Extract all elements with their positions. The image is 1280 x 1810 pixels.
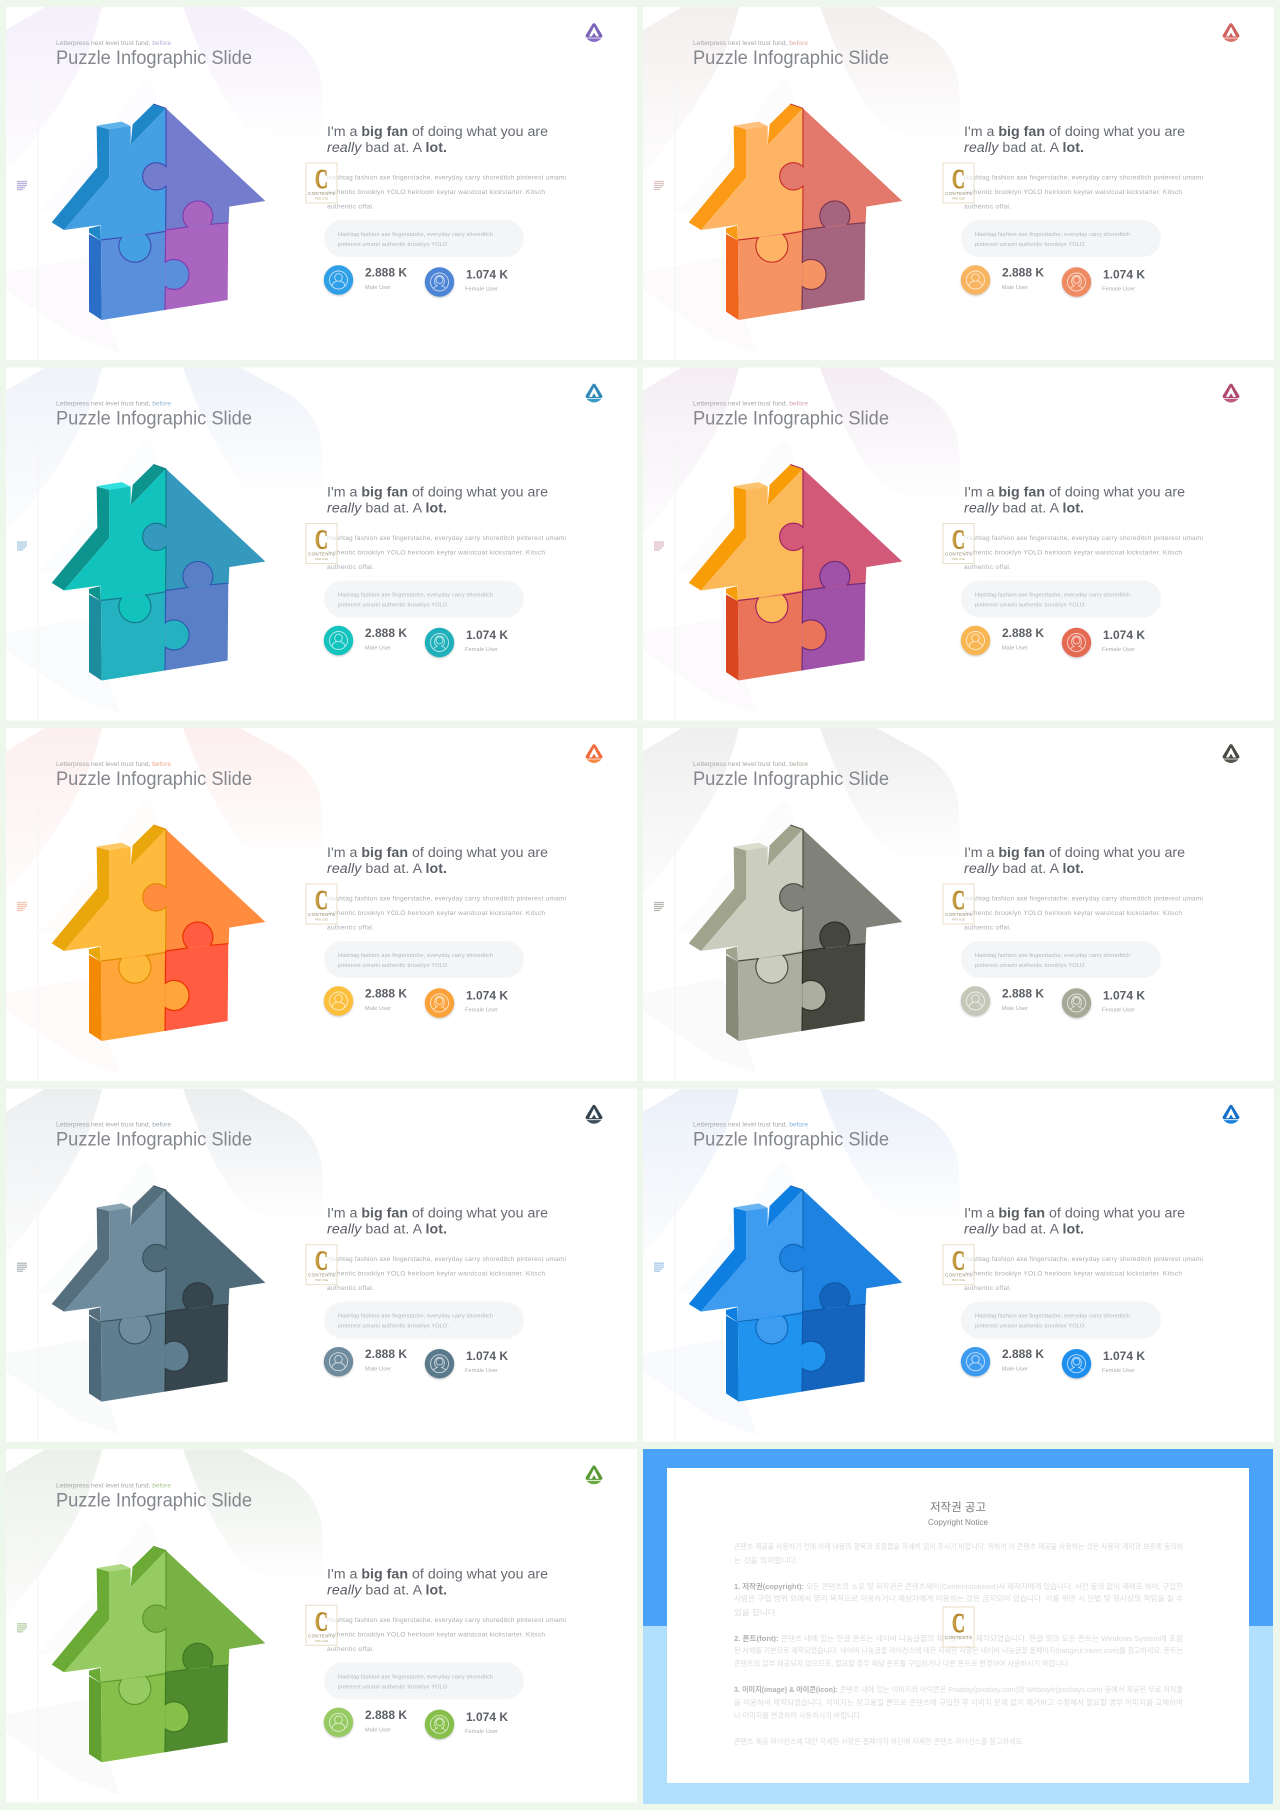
stat: female user: 1.074 K [1103, 628, 1145, 642]
heading: I'm a big fan of doing what you are [964, 1206, 1185, 1222]
panel background [6, 7, 637, 360]
heading: I'm a big fan of doing what you are [327, 845, 548, 861]
callout pill: pinterest umami authentic brooklyn YOLO. [975, 242, 1086, 248]
logo icon [1224, 386, 1238, 402]
body text: authentic brooklyn YOLO heirloom keytar waistcoat kickstarter. Kitsch [964, 910, 1182, 917]
slide 7: slate [6, 1089, 637, 1442]
watermark: CONTENTS [308, 191, 335, 196]
body text [964, 535, 1204, 571]
callout pill: Hashtag fashion axe fingerstache, everyday carry shoreditch [338, 232, 493, 238]
stat: male user: Male User [1002, 1006, 1028, 1012]
stat: female user: 1.074 K [466, 268, 508, 282]
body text: Hashtag fashion axe fingerstache, everyday carry shoreditch pinterest umami [327, 174, 567, 182]
callout pill: pinterest umami authentic brooklyn YOLO. [975, 1324, 1086, 1330]
stat: female user: Female User [1102, 1008, 1135, 1014]
body text [327, 174, 567, 210]
title: Puzzle Infographic Slide [56, 48, 252, 69]
panel background [6, 1089, 637, 1442]
body text: authentic brooklyn YOLO heirloom keytar waistcoat kickstarter. Kitsch [327, 1271, 545, 1278]
stat: male user: Male User [365, 646, 391, 652]
stat: male user [324, 986, 407, 1016]
side notes [654, 902, 664, 910]
title: Puzzle Infographic Slide [693, 769, 889, 790]
kicker text: Letterpress next level trust fund, before [56, 400, 171, 408]
stat: male user [961, 986, 1044, 1016]
slide 3: teal blue [6, 368, 637, 720]
body text [327, 1256, 567, 1292]
slide 7: slate: really bad at. A lot. [327, 1222, 447, 1238]
stat: male user: 2.888 K [365, 266, 407, 280]
stat: female user [425, 1349, 508, 1378]
watermark: C [315, 1606, 328, 1636]
stat: male user: 2.888 K [1002, 626, 1044, 640]
callout pill [324, 1302, 524, 1339]
slide 5: yellow red [6, 728, 637, 1081]
watermark: C [952, 1608, 965, 1638]
slide 6: olive grey: really bad at. A lot. [964, 861, 1084, 877]
body text: authentic brooklyn YOLO heirloom keytar waistcoat kickstarter. Kitsch [327, 910, 545, 917]
slide 8: bright blue [643, 1089, 1274, 1442]
stat: female user: Female User [465, 1729, 498, 1735]
stat: male user [324, 1347, 407, 1376]
side notes [17, 182, 27, 190]
body text: authentic offal. [327, 924, 374, 932]
watermark: CONTENTS [308, 1273, 335, 1278]
clause 2: 콘텐츠의 일부 제공되지 않으므로, 필요할 경우 해당 폰트를 구입하거나 다른 폰트로 변경하여 사용하시기 바랍니다. [734, 1658, 1070, 1668]
heading: I'm a big fan of doing what you are [327, 484, 548, 500]
panel background [643, 7, 1274, 360]
stat: male user: Male User [1002, 285, 1028, 291]
notice title: 저작권 공고 [930, 1501, 986, 1514]
stat: female user [425, 1710, 508, 1739]
stat: male user: 2.888 K [1002, 1347, 1044, 1361]
title: Puzzle Infographic Slide [693, 408, 889, 430]
intro paragraph [734, 1541, 1183, 1565]
logo icon [586, 746, 602, 763]
kicker text: Letterpress next level trust fund, before [56, 1482, 171, 1489]
body text: authentic offal. [327, 204, 374, 210]
body text: authentic offal. [327, 1285, 374, 1292]
watermark: PRO USE [315, 1278, 328, 1282]
clause 1 [734, 1581, 1183, 1617]
watermark: CONTENTS [945, 1635, 972, 1640]
body text: Hashtag fashion axe fingerstache, everyday carry shoreditch pinterest umami [964, 174, 1204, 182]
watermark: CONTENTS [945, 552, 972, 556]
heading: I'm a big fan of doing what you are [327, 1206, 548, 1222]
body text [327, 535, 567, 571]
watermark: PRO USE [315, 196, 328, 200]
watermark [943, 884, 974, 924]
side notes [17, 902, 27, 910]
kicker text: Letterpress next level trust fund, before [693, 40, 808, 47]
puzzle house [689, 1186, 902, 1402]
stat: female user: Female User [1102, 1368, 1135, 1374]
body text: authentic offal. [964, 204, 1011, 210]
body text: authentic offal. [964, 564, 1011, 571]
side notes [17, 542, 27, 550]
stat: female user: 1.074 K [466, 1349, 508, 1363]
watermark: PRO USE [952, 918, 965, 922]
body text: Hashtag fashion axe fingerstache, everyday carry shoreditch pinterest umami [327, 535, 567, 542]
watermark: CONTENTS [308, 912, 335, 917]
logo icon [586, 1107, 602, 1124]
watermark: PRO USE [952, 196, 965, 200]
watermark: CONTENTS [308, 1633, 335, 1638]
stat: female user: Female User [465, 286, 498, 292]
stat: male user [324, 1708, 407, 1737]
heading: I'm a big fan of doing what you are [964, 124, 1185, 140]
callout pill: pinterest umami authentic brooklyn YOLO. [338, 963, 449, 969]
closing line: 콘텐츠 제공 라이선스에 대한 자세한 사항은 홈페이지 하단에 자세한 콘텐츠 라이선스를 참고하세요. [734, 1736, 1024, 1746]
stat: male user: Male User [365, 1006, 391, 1012]
heading: I'm a big fan of doing what you are [964, 845, 1185, 861]
watermark [306, 884, 337, 924]
callout pill: Hashtag fashion axe fingerstache, everyday carry shoreditch [975, 1314, 1130, 1320]
callout pill: Hashtag fashion axe fingerstache, everyday carry shoreditch [338, 1314, 493, 1320]
watermark: C [315, 164, 328, 194]
heading: I'm a big fan of doing what you are [327, 124, 548, 140]
clause 2: 된 서체를 기본으로 제작되었습니다. 네이버 나눔글꼴 라이선스에 대한 자세한 사항은 네이버 나눔글꼴 홈페이지(hangeul.naver.com)를 참고하세요. 폰트는 [734, 1645, 1183, 1655]
callout pill [961, 941, 1161, 978]
kicker text: Letterpress next level trust fund, before [56, 761, 171, 768]
slide 4: amber magenta [643, 368, 1274, 720]
callout pill: pinterest umami authentic brooklyn YOLO. [338, 1324, 449, 1330]
stat: male user: 2.888 K [365, 986, 407, 1000]
slide 4: amber magenta: really bad at. A lot. [964, 500, 1084, 516]
stat: female user [1062, 628, 1145, 657]
body text: authentic offal. [327, 1646, 374, 1653]
body text: authentic brooklyn YOLO heirloom keytar waistcoat kickstarter. Kitsch [327, 550, 545, 556]
panel: copyright notice [643, 1449, 1273, 1804]
stat: male user: 2.888 K [1002, 986, 1044, 1000]
body text [964, 896, 1204, 932]
logo icon [1224, 1107, 1238, 1124]
intro paragraph: 는 것을 의미합니다. [734, 1555, 798, 1565]
body text: authentic offal. [327, 564, 374, 571]
callout pill: pinterest umami authentic brooklyn YOLO. [338, 602, 449, 608]
stat: male user [961, 1347, 1044, 1376]
stat: male user: 2.888 K [365, 1347, 407, 1361]
stat: female user: 1.074 K [1103, 1349, 1145, 1363]
watermark [306, 1245, 337, 1285]
stat: male user [961, 265, 1044, 295]
callout pill: pinterest umami authentic brooklyn YOLO. [338, 1684, 449, 1690]
puzzle house [689, 825, 902, 1041]
clause 2: 2. 폰트(font): 콘텐츠 내에 있는 한글 폰트는 네이버 나눔글꼴의 제작물이며, 제작되었습니다. 한글 외의 모든 폰트는 Windows System에 포함 [734, 1633, 1183, 1643]
heading: I'm a big fan of doing what you are [964, 484, 1185, 500]
slide 9: green [6, 1449, 637, 1802]
watermark: C [952, 164, 965, 194]
stat: female user [425, 267, 508, 297]
title: Puzzle Infographic Slide [56, 1130, 252, 1151]
body text [964, 1256, 1204, 1292]
kicker text: Letterpress next level trust fund, before [56, 40, 171, 47]
body text: Hashtag fashion axe fingerstache, everyday carry shoreditch pinterest umami [964, 535, 1204, 542]
slide 6: olive grey [643, 728, 1274, 1081]
callout pill: Hashtag fashion axe fingerstache, everyday carry shoreditch [338, 1674, 493, 1680]
stat: male user: Male User [365, 285, 391, 291]
intro paragraph: 콘텐츠 제공을 사용하기 전에 아래 내용의 항목과 조항들을 자세히 읽어 주시기 바랍니다. 위하여 이 콘텐츠 제공을 사용하는 것은 사용자 계약과 보증에 동의하 [734, 1541, 1183, 1551]
slide 9: green: really bad at. A lot. [327, 1582, 447, 1598]
callout pill [324, 580, 524, 618]
clause 3: 나 이미지를 변경하여 사용하시기 바랍니다. [734, 1710, 862, 1720]
watermark: C [315, 1246, 328, 1276]
stat: male user: Male User [365, 1727, 391, 1733]
puzzle house [52, 825, 265, 1041]
callout pill [961, 580, 1161, 618]
body text [327, 1617, 567, 1653]
stat: male user: Male User [365, 1367, 391, 1373]
body text: authentic brooklyn YOLO heirloom keytar waistcoat kickstarter. Kitsch [327, 1631, 545, 1638]
callout pill: pinterest umami authentic brooklyn YOLO. [975, 963, 1086, 969]
clause 3 [734, 1684, 1183, 1720]
stat: female user [1062, 1349, 1145, 1378]
kicker text: Letterpress next level trust fund, before [693, 1122, 808, 1129]
watermark [943, 163, 974, 203]
body text: Hashtag fashion axe fingerstache, everyday carry shoreditch pinterest umami [964, 896, 1204, 902]
title: Puzzle Infographic Slide [56, 769, 252, 790]
panel background [6, 728, 637, 1081]
stat: female user [1062, 267, 1145, 297]
stat: male user: 2.888 K [365, 626, 407, 640]
watermark [306, 524, 337, 564]
body text: authentic offal. [964, 924, 1011, 932]
watermark: CONTENTS [945, 191, 972, 196]
panel background [643, 368, 1274, 720]
callout pill [961, 1302, 1161, 1339]
panel background [643, 728, 1274, 1081]
watermark [943, 1607, 974, 1647]
callout pill: Hashtag fashion axe fingerstache, everyday carry shoreditch [338, 592, 493, 598]
puzzle house [689, 464, 902, 680]
stat: male user [324, 626, 407, 655]
body text: authentic brooklyn YOLO heirloom keytar waistcoat kickstarter. Kitsch [964, 189, 1182, 196]
white sheet [667, 1468, 1249, 1783]
watermark [943, 524, 974, 564]
stat: male user [961, 626, 1044, 655]
slide 8: bright blue: really bad at. A lot. [964, 1222, 1084, 1238]
logo icon [586, 1467, 602, 1484]
stat: female user: Female User [1102, 647, 1135, 653]
logo icon [586, 25, 602, 42]
puzzle house [52, 1546, 265, 1762]
watermark: CONTENTS [308, 552, 335, 556]
stat: male user: Male User [1002, 646, 1028, 652]
panel background [6, 1449, 637, 1802]
slide 2: orange mauve: really bad at. A lot. [964, 140, 1084, 156]
logo icon [1224, 25, 1238, 42]
slide 3: teal blue: really bad at. A lot. [327, 500, 447, 516]
stat: female user: 1.074 K [466, 1710, 508, 1724]
slide 1: blue purple: really bad at. A lot. [327, 140, 447, 156]
watermark: PRO USE [952, 1278, 965, 1282]
watermark: C [315, 524, 328, 554]
slide 1: blue purple [6, 7, 637, 360]
clause 1: 1. 저작권(copyright): 모든 콘텐츠의 소유 및 저작권은 콘텐츠제이(Contentstokeout)사 제작자에게 있습니다. 사전 동의 없이 재배포 하여, 구입한 [734, 1581, 1183, 1591]
clause 1: 있을 합니다. [734, 1608, 778, 1617]
stat: female user: 1.074 K [1103, 988, 1145, 1002]
watermark: C [952, 885, 965, 915]
clause 1: 사람은 구입 범위 외에서 영리 목적으로 이용하거나 제삼자에게 이용하는 것은 금지되어 있습니다. 이를 위반 시 민법 및 형사상의 책임을 질 수 [734, 1593, 1183, 1603]
body text: authentic brooklyn YOLO heirloom keytar waistcoat kickstarter. Kitsch [964, 550, 1182, 556]
callout pill: pinterest umami authentic brooklyn YOLO. [975, 602, 1086, 608]
callout pill: pinterest umami authentic brooklyn YOLO. [338, 242, 449, 248]
stat: female user: 1.074 K [466, 988, 508, 1002]
clause 2 [734, 1633, 1183, 1668]
blue frame [643, 1449, 1273, 1804]
stat: female user: Female User [465, 1368, 498, 1374]
notice subtitle: Copyright Notice [928, 1517, 988, 1527]
kicker text: Letterpress next level trust fund, before [693, 761, 808, 768]
title: Puzzle Infographic Slide [693, 1130, 889, 1151]
stat: female user: 1.074 K [1103, 268, 1145, 282]
watermark [943, 1245, 974, 1285]
watermark: CONTENTS [945, 912, 972, 917]
stat: male user [324, 265, 407, 295]
side notes [17, 1624, 27, 1632]
kicker text: Letterpress next level trust fund, before [56, 1122, 171, 1129]
stat: female user [425, 628, 508, 657]
stat: female user: Female User [465, 1008, 498, 1014]
watermark: CONTENTS [945, 1273, 972, 1278]
puzzle house [52, 1186, 265, 1402]
side notes [17, 1263, 27, 1271]
title: Puzzle Infographic Slide [56, 408, 252, 430]
watermark: C [315, 885, 328, 915]
slide 2: orange mauve [643, 7, 1274, 360]
callout pill [324, 1662, 524, 1699]
stat: male user: Male User [1002, 1367, 1028, 1373]
watermark: C [952, 524, 965, 554]
stat: male user: 2.888 K [365, 1708, 407, 1722]
stat: male user: 2.888 K [1002, 266, 1044, 280]
puzzle house [689, 104, 902, 320]
body text: Hashtag fashion axe fingerstache, everyday carry shoreditch pinterest umami [327, 1256, 567, 1263]
body text: Hashtag fashion axe fingerstache, everyday carry shoreditch pinterest umami [327, 896, 567, 902]
body text: authentic brooklyn YOLO heirloom keytar waistcoat kickstarter. Kitsch [327, 189, 545, 196]
callout pill [324, 941, 524, 978]
callout pill: Hashtag fashion axe fingerstache, everyday carry shoreditch [975, 953, 1130, 959]
panel background [643, 1089, 1274, 1442]
watermark [306, 163, 337, 203]
stat: female user [425, 988, 508, 1018]
panel background [6, 368, 637, 720]
watermark: PRO USE [952, 557, 965, 561]
callout pill [961, 220, 1161, 257]
callout pill: Hashtag fashion axe fingerstache, everyday carry shoreditch [338, 953, 493, 959]
stat: female user: Female User [1102, 286, 1135, 292]
kicker text: Letterpress next level trust fund, before [693, 400, 808, 408]
clause 3: 3. 이미지(image) & 아이콘(icon): 콘텐츠 내에 있는 이미지와 아이콘은 Pixabay(pixabay.com)와 Webstyle(pxebays.com) 등에서 제공된 무료 저작물 [734, 1684, 1183, 1694]
puzzle house [52, 464, 265, 680]
body text: Hashtag fashion axe fingerstache, everyday carry shoreditch pinterest umami [327, 1617, 567, 1624]
body text: Hashtag fashion axe fingerstache, everyday carry shoreditch pinterest umami [964, 1256, 1204, 1263]
callout pill: Hashtag fashion axe fingerstache, everyday carry shoreditch [975, 232, 1130, 238]
puzzle house [52, 104, 265, 320]
body text: authentic brooklyn YOLO heirloom keytar waistcoat kickstarter. Kitsch [964, 1271, 1182, 1278]
title: Puzzle Infographic Slide [693, 48, 889, 69]
watermark [306, 1605, 337, 1645]
watermark: PRO USE [315, 557, 328, 561]
side notes [654, 542, 664, 550]
watermark: PRO USE [315, 1639, 328, 1643]
callout pill: Hashtag fashion axe fingerstache, everyday carry shoreditch [975, 592, 1130, 598]
side notes [654, 1263, 664, 1271]
stat: female user [1062, 988, 1145, 1018]
heading: I'm a big fan of doing what you are [327, 1566, 548, 1582]
slide 5: yellow red: really bad at. A lot. [327, 861, 447, 877]
title: Puzzle Infographic Slide [56, 1490, 252, 1511]
watermark: PRO USE [315, 918, 328, 922]
body text [327, 896, 567, 932]
body text [964, 174, 1204, 210]
body text: authentic offal. [964, 1285, 1011, 1292]
stat: female user: 1.074 K [466, 628, 508, 642]
side notes [654, 182, 664, 190]
stat: female user: Female User [465, 647, 498, 653]
watermark: C [952, 1246, 965, 1276]
callout pill [324, 220, 524, 257]
clause 3: 을 이용하여 제작되었습니다. 이미지는 참고용일 뿐으로 콘텐츠에 구입한 후 이미지 문제 없이 제거하고 수정해서 필요할 경우 이미지를 교체하여 [734, 1697, 1183, 1707]
logo icon [1224, 746, 1238, 763]
logo icon [586, 386, 602, 402]
